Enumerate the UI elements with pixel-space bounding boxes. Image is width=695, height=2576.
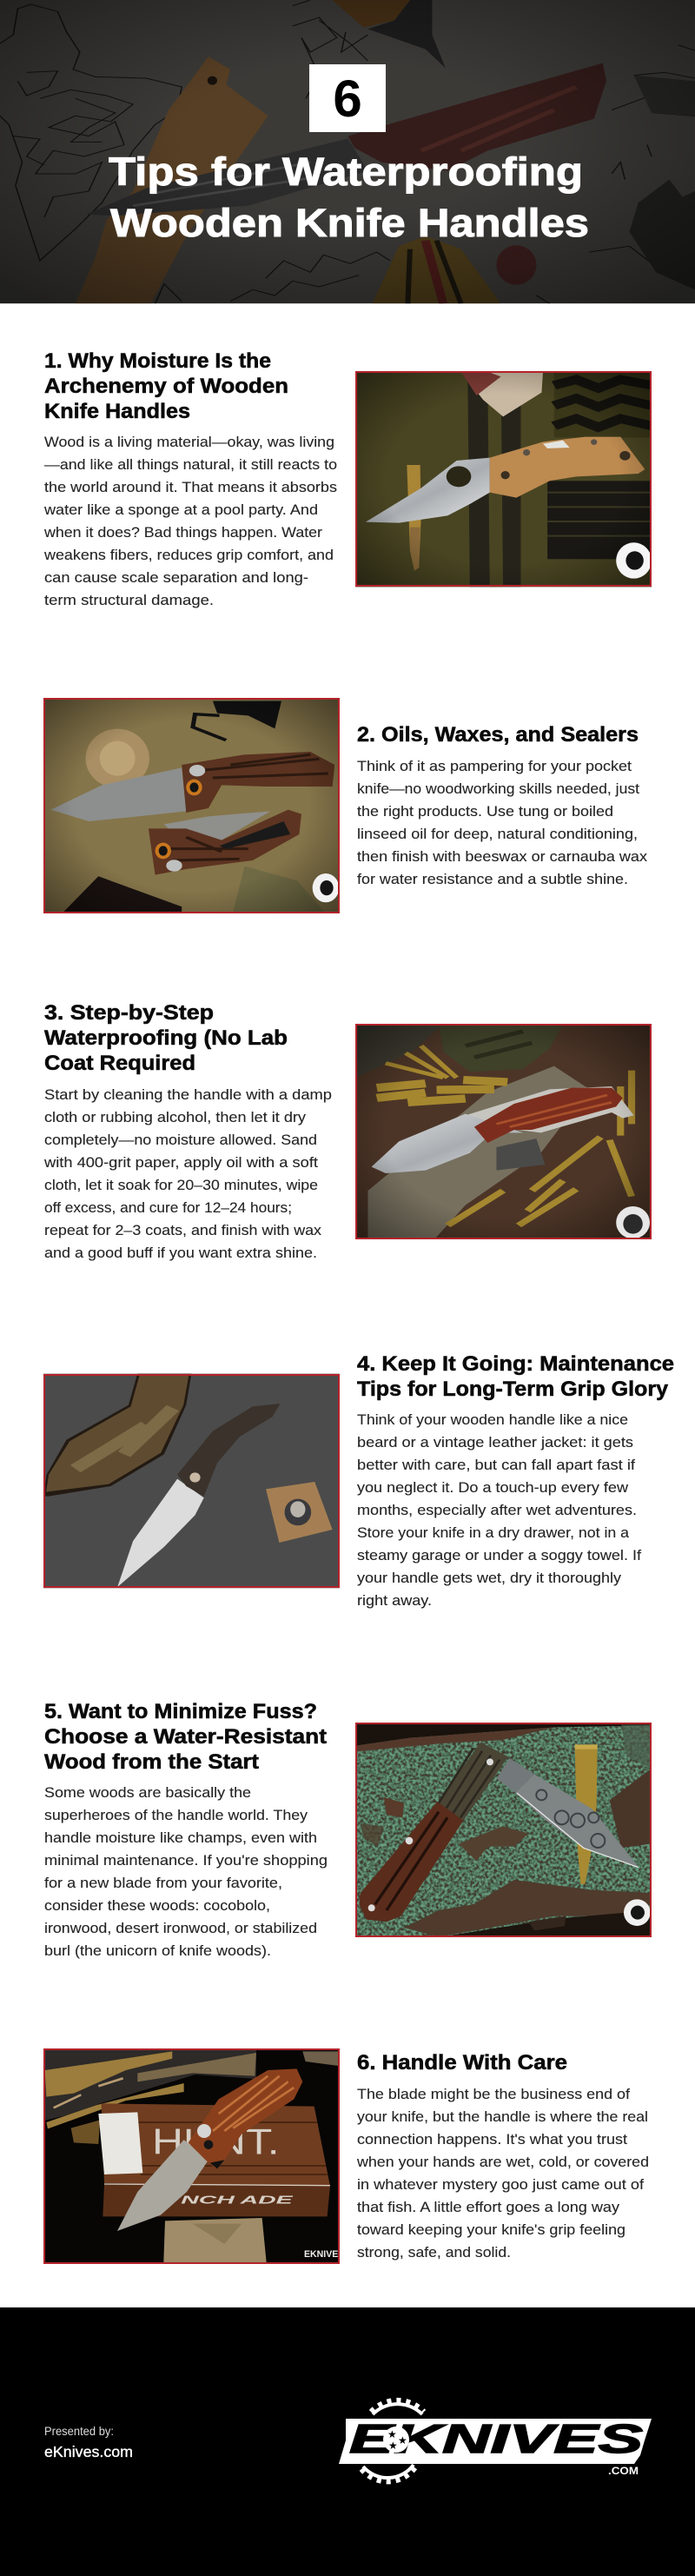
- heading: tip 5: [44, 1700, 327, 1774]
- text block: tip 4: better with care, but can fall apart fast if: [357, 1457, 635, 1473]
- presented by text: eKnives.com: [44, 2443, 133, 2460]
- logo: eKnives: [339, 2400, 652, 2481]
- hero background photo: [0, 0, 695, 303]
- panel: hero header: [0, 0, 695, 303]
- text block: tip 2: then finish with beeswax or carnauba wax: [357, 848, 648, 865]
- text block: tip 4: Think of your wooden handle like a nice: [357, 1411, 628, 1428]
- text block: tip 3: [43, 1086, 332, 1261]
- text block: tip 2: linseed oil for deep, natural conditioning,: [357, 826, 638, 842]
- text block: tip 6: in whatever mystery goo just came out of: [357, 2176, 644, 2193]
- text block: tip 4: [357, 1411, 641, 1609]
- presented by text: [44, 2424, 133, 2460]
- text block: tip 2: the right products. Use tung or boiled: [357, 803, 613, 820]
- text block: tip 6: when your hands are wet, cold, or covered: [356, 2154, 649, 2170]
- text block: tip 4: beard or a vintage leather jacket: it gets: [357, 1434, 633, 1451]
- text block: tip 6: strong, safe, and solid.: [357, 2244, 511, 2261]
- text block: tip 3: Start by cleaning the handle with a damp: [44, 1086, 332, 1103]
- panel: footer: [0, 2307, 695, 2576]
- text block: tip 1: the world around it. That means it absorbs: [44, 479, 337, 495]
- text block: tip 1: —and like all things natural, it still reacts to: [44, 456, 337, 473]
- title: Wooden Knife Handles: [110, 201, 589, 245]
- text block: tip 6: that fish. A little effort goes a long way: [357, 2199, 620, 2215]
- text block: tip 6: your knife, but the handle is where the real: [357, 2108, 648, 2125]
- panel: tip 3: [43, 1001, 652, 1261]
- gear hub with stars: ★: [398, 2434, 407, 2447]
- text block: tip 1: weakens fibers, reduces grip comfort, and: [43, 547, 334, 563]
- heading: tip 4: 4. Keep It Going: Maintenance: [357, 1352, 674, 1376]
- text block: tip 4: right away.: [357, 1592, 432, 1609]
- text block: tip 5: for a new blade from your favorite,: [44, 1875, 282, 1891]
- panel: tip 4: [43, 1352, 674, 1609]
- text block: tip 2: Think of it as pampering for your pocket: [357, 758, 632, 774]
- text block: tip 1: can cause scale separation and long-: [44, 569, 308, 586]
- photo: Buck knife with cartridges: [355, 1024, 652, 1239]
- presented by text: Presented by:: [44, 2424, 114, 2438]
- photo: Benchmade North Fork on wooden box: [43, 2048, 339, 2263]
- gear hub with stars: ★: [388, 2440, 398, 2452]
- heading: tip 3: 3. Step-by-Step: [44, 1001, 214, 1025]
- text block: tip 6: [356, 2086, 649, 2261]
- text block: tip 1: [43, 434, 337, 608]
- knife blade: [86, 138, 367, 216]
- title: Tips for Waterproofing: [109, 149, 583, 194]
- text block: tip 4: months, especially after wet adventures.: [357, 1502, 637, 1518]
- heading: tip 2: 2. Oils, Waxes, and Sealers: [357, 723, 639, 747]
- text block: tip 2: knife—no woodworking skills needed, just: [357, 780, 639, 797]
- number badge: 6: [333, 70, 362, 128]
- photo: Benchmade knives on canvas: [43, 698, 340, 913]
- heading: tip 5: 5. Want to Minimize Fuss?: [44, 1700, 317, 1723]
- heading: tip 5: Choose a Water-Resistant: [44, 1725, 327, 1749]
- text block: tip 6: toward keeping your knife's grip feeling: [357, 2221, 626, 2238]
- heading: tip 4: Tips for Long-Term Grip Glory: [357, 1378, 669, 1401]
- text block: tip 5: ironwood, desert ironwood, or stabilized: [44, 1920, 317, 1936]
- text block: tip 6: The blade might be the business end of: [357, 2086, 630, 2102]
- text block: tip 4: your handle gets wet, dry it thoroughly: [357, 1570, 622, 1586]
- heading: tip 3: [44, 1001, 288, 1075]
- panel: tip 5: [44, 1700, 652, 1959]
- text block: tip 3: repeat for 2–3 coats, and finish with wax: [44, 1222, 322, 1238]
- photo: damascus folder on patinated metal: [356, 1723, 652, 1937]
- top object: [333, 0, 410, 28]
- heading: tip 1: Knife Handles: [44, 400, 190, 423]
- text block: tip 5: burl (the unicorn of knife woods).: [44, 1942, 271, 1959]
- photo: folding knife on slate with leather sheath: [43, 1374, 340, 1588]
- gear hub with stars: ★: [387, 2428, 397, 2440]
- text block: tip 3: off excess, and cure for 12–24 hours;: [44, 1199, 292, 1216]
- photo: Benchmade North Fork on wooden box: EKNIVE: [304, 2249, 338, 2260]
- text block: tip 5: handle moisture like champs, even with: [44, 1829, 317, 1846]
- heading: tip 5: Wood from the Start: [44, 1750, 259, 1774]
- heading: tip 6: 6. Handle With Care: [357, 2051, 567, 2075]
- text block: tip 3: with 400-grit paper, apply oil with a soft: [43, 1154, 318, 1171]
- heading: tip 4: [357, 1352, 674, 1401]
- text block: tip 3: completely—no moisture allowed. Sand: [44, 1132, 317, 1148]
- text block: tip 4: you neglect it. Do a touch-up every few: [357, 1479, 629, 1496]
- photo: Benchmade North Fork on wooden box: HUNT.: [152, 2121, 280, 2162]
- text block: tip 3: cloth, let it soak for 20–30 minutes, wipe: [44, 1177, 318, 1193]
- text block: tip 5: superheroes of the handle world. They: [44, 1807, 308, 1823]
- text block: tip 3: and a good buff if you want extra shine.: [44, 1245, 317, 1261]
- text block: tip 1: term structural damage.: [44, 592, 214, 608]
- text block: tip 2: [357, 758, 648, 887]
- text block: tip 5: consider these woods: cocobolo,: [44, 1897, 270, 1914]
- text block: tip 4: Store your knife in a dry drawer, not in a: [357, 1524, 630, 1541]
- panel: tip 6: [43, 2048, 649, 2263]
- gear arcs: [361, 2400, 424, 2481]
- knife handle: [348, 63, 606, 171]
- text block: tip 1: when it does? Bad things happen. Water: [43, 524, 322, 541]
- wooden sheath: [76, 56, 268, 303]
- heading: tip 1: Archenemy of Wooden: [44, 375, 288, 398]
- wordmark: EKNIVES: [349, 2416, 644, 2461]
- heading: tip 3: Waterproofing (No Lab: [44, 1026, 288, 1050]
- photo: Spyderco knife on olive cloth: [355, 372, 652, 587]
- text block: tip 5: minimal maintenance. If you're shopping: [44, 1852, 328, 1869]
- bottom object: [373, 236, 501, 303]
- text block: tip 3: cloth or rubbing alcohol, then let it dry: [44, 1109, 307, 1125]
- .com label: .COM: [608, 2465, 639, 2477]
- heading: tip 3: Coat Required: [44, 1052, 195, 1075]
- text block: tip 4: steamy garage or under a soggy towel. If: [357, 1547, 641, 1564]
- gear hub with stars: [383, 2427, 409, 2453]
- heading: tip 1: [44, 349, 288, 423]
- heading: tip 1: 1. Why Moisture Is the: [44, 349, 271, 373]
- text block: tip 6: connection happens. It's what you trust: [357, 2131, 627, 2148]
- text block: tip 1: Wood is a living material—okay, was living: [44, 434, 334, 450]
- wordmark plate: [339, 2419, 652, 2464]
- photo: Benchmade North Fork on wooden box: NCH ADE: [181, 2194, 294, 2206]
- panel: tip 2: [43, 698, 648, 913]
- number badge: [309, 64, 386, 132]
- text block: tip 1: water like a sponge at a pool party. And: [43, 501, 318, 518]
- text block: tip 2: for water resistance and a subtle shine.: [357, 871, 628, 887]
- text block: tip 5: [44, 1784, 328, 1959]
- panel: tip 1: [43, 349, 652, 608]
- title: [109, 149, 589, 245]
- text block: tip 5: Some woods are basically the: [44, 1784, 251, 1801]
